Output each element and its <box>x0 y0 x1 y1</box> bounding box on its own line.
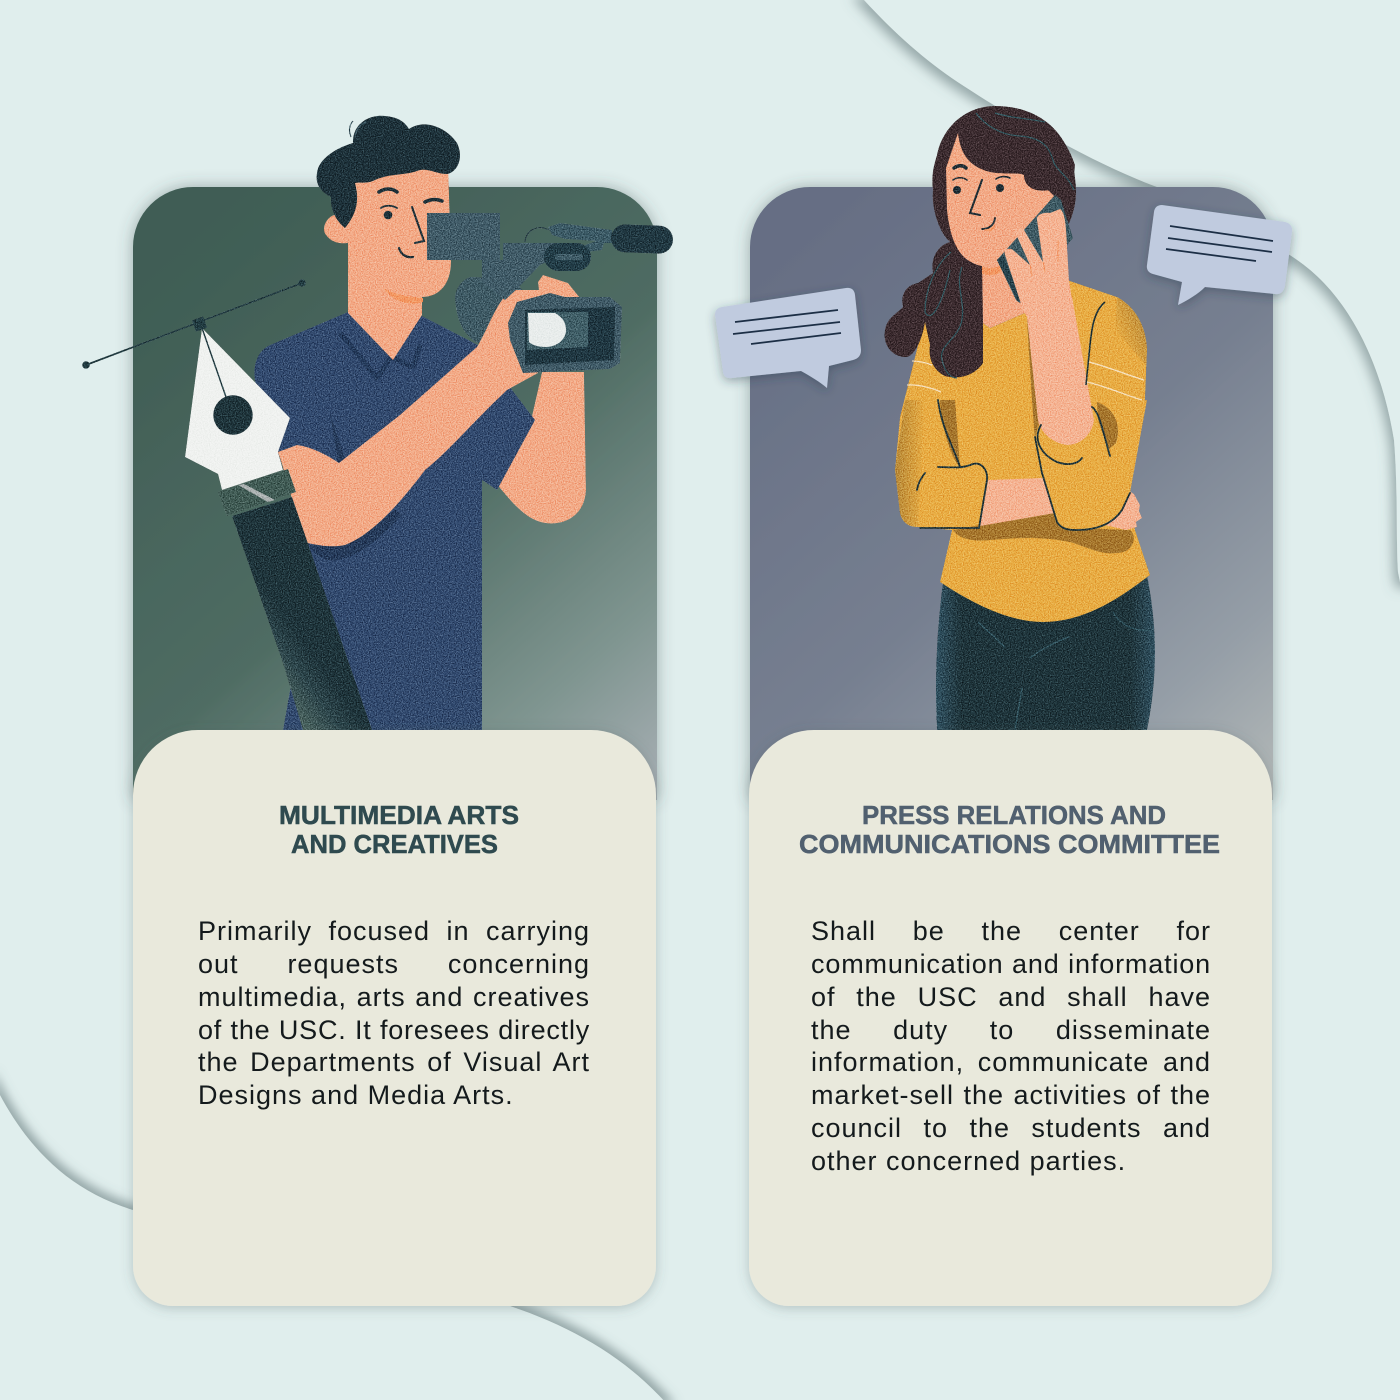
speech bubble right <box>1147 205 1292 305</box>
mic cable <box>525 228 549 242</box>
hair back and curls <box>885 106 1076 377</box>
camera body <box>508 293 622 373</box>
phone <box>997 195 1073 303</box>
elbow shadow <box>1097 402 1118 450</box>
body text left: Designs and Media Arts. <box>198 1080 514 1110</box>
neck and face <box>340 160 451 360</box>
video camera <box>427 213 673 373</box>
heading: multimedia arts and creatives <box>279 800 519 859</box>
heading: multimedia arts and creatives: MULTIMEDIA ARTS <box>279 800 519 830</box>
ear <box>324 214 348 243</box>
rear arm and fingers <box>495 275 586 523</box>
heading: press relations and communications committee: COMMUNICATIONS COMMITTEE <box>799 829 1220 859</box>
stray hair strand <box>350 121 366 137</box>
jeans creases <box>978 612 1150 730</box>
finger seams <box>1030 240 1058 276</box>
left cuff outline <box>917 400 987 528</box>
panel: press relations illustration background <box>750 187 1273 800</box>
microphone mount <box>548 223 612 252</box>
sweater shadows under arms <box>953 513 1134 553</box>
body text left: of the USC. It foresees directly <box>198 1015 590 1045</box>
body text right: market-sell the activities of the <box>811 1080 1211 1110</box>
smile blush <box>984 224 995 231</box>
jeans <box>936 575 1155 730</box>
shirt underarm shadow <box>310 510 402 560</box>
sleeve seams <box>1086 302 1105 385</box>
fringe and crown <box>958 107 1075 195</box>
message lines <box>1166 226 1273 261</box>
microphone <box>611 224 673 254</box>
body text left: multimedia, arts and creatives <box>198 982 590 1012</box>
neck shadow <box>982 262 1005 275</box>
woman's facial features <box>953 166 1010 229</box>
crossed forearm <box>980 478 1055 526</box>
shirt collar <box>340 333 420 378</box>
background curve: bottom left <box>0 1075 672 1400</box>
sleeve seam shadow <box>330 413 345 463</box>
illustration: woman on phone <box>885 106 1155 730</box>
background curve: top right <box>855 0 1400 582</box>
face <box>946 133 1058 267</box>
panel: multimedia illustration background <box>133 187 657 800</box>
sleeve shading <box>895 400 925 527</box>
heading: press relations and communications committee <box>799 800 1220 859</box>
polo shirt <box>254 312 535 730</box>
camera ring <box>544 243 591 271</box>
hair <box>317 116 460 228</box>
body text left: Primarily focused in carrying <box>198 916 590 946</box>
sweater <box>895 280 1150 622</box>
chin shadow <box>383 288 423 304</box>
body text right: information, communicate and <box>811 1047 1211 1077</box>
text card left <box>133 730 656 1306</box>
lens highlight <box>528 313 566 347</box>
camera hood opening <box>525 307 615 365</box>
illustration: man with video camera <box>254 116 673 730</box>
collar highlight <box>238 484 275 502</box>
body text left <box>198 916 590 1110</box>
folded arm outline <box>1035 437 1130 530</box>
neck <box>982 262 1027 328</box>
flip screen <box>427 213 500 260</box>
raised forearm <box>1027 297 1094 445</box>
nib hole <box>213 395 253 435</box>
hand holding phone <box>1005 209 1072 317</box>
body text right: communication and information <box>811 949 1211 979</box>
bezier handle <box>86 283 302 365</box>
camera lens frame <box>527 312 588 350</box>
body text right: Shall be the center for <box>811 916 1211 946</box>
body text right: other concerned parties. <box>811 1146 1126 1176</box>
body text right: of the USC and shall have <box>811 982 1211 1012</box>
pen tool icon <box>82 279 372 730</box>
right arm and hand <box>278 290 550 546</box>
hand at waist <box>1105 490 1142 530</box>
nib slit <box>202 328 226 397</box>
message lines <box>733 310 841 344</box>
body text left: out requests concerning <box>198 949 590 979</box>
body text right <box>811 916 1211 1176</box>
body text right: council to the students and <box>811 1113 1211 1143</box>
body text right: the duty to disseminate <box>811 1015 1211 1045</box>
heading: press relations and communications committee: PRESS RELATIONS AND <box>862 800 1166 830</box>
pen collar <box>218 469 296 516</box>
pen barrel <box>232 497 372 730</box>
hair strands <box>976 113 1074 190</box>
pen nib <box>185 328 290 490</box>
heading: multimedia arts and creatives: AND CREATIVES <box>291 829 498 859</box>
eyes and brows <box>379 189 442 257</box>
speech bubble left <box>715 288 861 388</box>
text card right <box>749 730 1272 1306</box>
cuff line <box>1038 407 1110 464</box>
camera lens barrel <box>455 277 530 345</box>
camera handle <box>482 243 575 300</box>
body text left: the Departments of Visual Art <box>198 1047 590 1077</box>
folded right arm <box>1035 400 1147 530</box>
